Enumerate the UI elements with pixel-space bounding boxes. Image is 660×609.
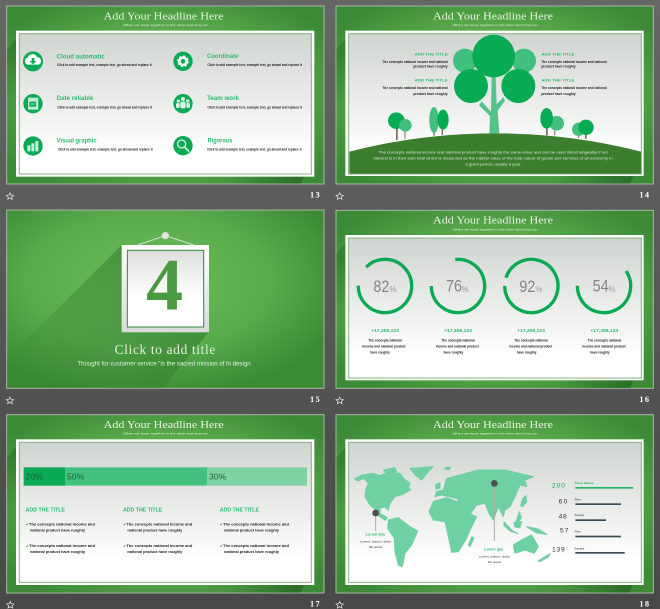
column 2: national product have roughly: [127, 550, 183, 554]
map pin right: Sit amet: [488, 560, 501, 564]
callout bottom left: [382, 79, 448, 96]
small trees left: [388, 107, 449, 140]
stat column 2: The concepts national: [441, 338, 475, 342]
stat 60: Plan: [575, 497, 581, 501]
item: coordinate: Coordinate: [207, 53, 239, 60]
item: rigorous: Click to add example text, example text, go ahead and replace it: [207, 148, 303, 152]
stat column 3: +17,356,123: [517, 328, 545, 334]
stat 60: 60: [559, 499, 568, 506]
slide 17 content panel: [16, 439, 314, 585]
map pin left: Sit amet: [369, 545, 383, 549]
stat 48: Sample: [574, 513, 585, 517]
column 1: ADD THE TITLE: [26, 507, 65, 513]
slide number: 13: [310, 191, 320, 200]
stat 57: 57: [560, 528, 569, 535]
item: cloud automatic: [57, 54, 153, 67]
slide number: 15: [310, 395, 320, 404]
column 2: [123, 507, 192, 554]
slide 17 panel shadows: [7, 448, 304, 593]
stat column 4: [582, 328, 627, 354]
ring 82%: %: [389, 285, 396, 294]
icon: star: [7, 601, 14, 608]
hill: [349, 133, 641, 174]
stacked bar: 50%: [67, 472, 85, 482]
callout bottom left: product have roughly: [413, 92, 448, 96]
map pin left: Lorem Ipls: [366, 533, 385, 537]
item: visual graphic: Click to add example text, example text, go ahead and replace it: [58, 148, 154, 152]
slide 18: [336, 415, 653, 608]
slide 14: [336, 6, 653, 200]
slide number: 16: [639, 395, 649, 404]
item: cloud automatic: Click to add example text, example text, go ahead and replace it: [57, 63, 153, 67]
column 3: ADD THE TITLE: [220, 507, 259, 513]
stat column 2: have roughly: [444, 350, 463, 354]
slide 18 panel shadows: [336, 448, 633, 593]
icon: cloud download: [23, 51, 43, 71]
callout top right: [541, 53, 607, 69]
item: rigorous: [207, 138, 303, 152]
hill paragraph: The concepts national income and national product have roughly the same value and can be used interchangeably if our: [379, 151, 609, 155]
stat 48: [559, 513, 606, 521]
hanging card: [122, 232, 209, 332]
stat column 1: +17,356,123: [371, 328, 399, 334]
column 3: national product have roughly: [224, 529, 279, 533]
stat 57: [560, 528, 621, 537]
icon: magnifier: [173, 136, 193, 155]
world map: [354, 467, 550, 567]
column 3: ✓The concepts national income and: [220, 544, 289, 548]
icon: team: [173, 94, 193, 113]
column 2: ADD THE TITLE: [123, 507, 163, 513]
column 1: national product have roughly: [30, 550, 85, 554]
slide 15 title: Click to add title: [115, 342, 215, 357]
item: visual graphic: [57, 138, 154, 152]
map pin right: [479, 480, 510, 564]
callout top right: The concepts national income and national: [541, 60, 607, 64]
small trees right: [540, 108, 594, 139]
slide 13 subheading: When we hope together in the short and long run: [123, 23, 209, 27]
stat column 2: [436, 328, 480, 354]
slide 13: [6, 6, 324, 200]
map pin left: Lorem, ipsum, dolor: [360, 539, 391, 543]
slide 15 background: [7, 210, 324, 388]
ring 76%: 76: [446, 276, 462, 295]
item: date reliable: Date reliable: [57, 95, 94, 102]
hanging card: 4: [146, 245, 183, 327]
ring 92%: 92: [519, 277, 535, 296]
slide 14 content panel: [345, 31, 644, 176]
ring 82%: [347, 248, 423, 324]
column 2: national product have roughly: [127, 529, 183, 533]
stat column 1: income and national product: [362, 344, 407, 348]
hill paragraph: interest is in their sum total which is measured as the market value of the total output of goods and services of an economy in: [374, 157, 613, 161]
item: rigorous: Rigorous: [208, 138, 233, 145]
stat 200: [552, 481, 633, 489]
item: coordinate: Click to add example text, example text, go ahead and replace it: [207, 63, 303, 67]
slide 16: [336, 210, 653, 404]
slide 17 frame: [7, 415, 324, 593]
stat 139: [552, 546, 625, 554]
slide 16 headline: Add Your Headline Here: [433, 216, 553, 227]
slide 13 frame: [7, 6, 324, 184]
stat column 2: income and national product: [436, 344, 480, 348]
stat column 3: income and national product: [509, 344, 553, 348]
column 1: [26, 507, 95, 554]
slide 15: [6, 210, 324, 404]
callout top left: ADD THE TITLE: [415, 53, 448, 57]
stacked bar: 20%: [26, 472, 43, 482]
stat column 3: The concepts national: [514, 338, 548, 342]
stat column 3: [509, 328, 553, 354]
icon: star: [336, 397, 343, 404]
column 2: ✓The concepts national income and: [123, 523, 192, 527]
stat column 2: +17,356,123: [444, 328, 472, 334]
slide 17 subheading: When we hope together in the short and long run: [123, 432, 209, 436]
ring 76%: [429, 257, 487, 315]
callout bottom right: [541, 79, 607, 96]
stat column 4: The concepts national: [588, 338, 621, 342]
stat 48: 48: [559, 513, 567, 520]
icon: star: [6, 397, 14, 404]
slide 14 frame: [336, 6, 653, 184]
stat 200: New Week: [575, 481, 594, 485]
stacked bar: 30%: [209, 472, 227, 482]
stat column 1: [362, 328, 407, 354]
stat column 4: +17,356,123: [590, 328, 618, 334]
slide 15 subtitle: Thought for customer service "is the sacred mission of hi design: [77, 361, 251, 368]
slide 18 subheading: When we hope together in the short and long run: [453, 432, 538, 436]
stat 57: Plan: [575, 530, 581, 534]
item: date reliable: [57, 95, 153, 110]
ring 92%: [498, 252, 565, 320]
icon: star: [6, 193, 14, 199]
slide 18 frame: [336, 415, 653, 593]
map pin right: Lorem, ipsum, dolor: [479, 554, 510, 558]
ring 92%: %: [535, 285, 542, 294]
hill paragraph: [374, 151, 613, 167]
long shadow: [7, 245, 209, 388]
column 3: ✓The concepts national income and: [220, 523, 289, 527]
callout bottom right: ADD THE TITLE: [541, 79, 575, 83]
stat 139: 139: [552, 546, 565, 553]
slide 18 headline: Add Your Headline Here: [433, 420, 553, 431]
column 1: ✓The concepts national income and: [26, 544, 95, 548]
icon: gear: [173, 52, 193, 71]
callout bottom left: ADD THE TITLE: [415, 79, 448, 83]
icon: star: [336, 193, 343, 199]
column 2: ✓The concepts national income and: [123, 544, 192, 548]
slide 18 content panel: [345, 439, 644, 585]
callout top left: The concepts national income and national: [382, 60, 448, 64]
slide 14 headline: Add Your Headline Here: [433, 11, 553, 22]
callout top right: ADD THE TITLE: [541, 53, 575, 57]
callout bottom right: product have roughly: [541, 92, 576, 96]
ring 54%: 54: [593, 276, 609, 295]
stat 60: [559, 497, 621, 506]
slide 16 content panel: [345, 235, 644, 380]
item: coordinate: [207, 53, 303, 67]
ring 54%: [567, 249, 641, 323]
icon: star: [336, 601, 343, 608]
item: date reliable: Click to add example text, example text, go ahead and replace it: [57, 106, 153, 110]
slide 17 headline: Add Your Headline Here: [104, 420, 224, 431]
slide number: 18: [639, 599, 649, 608]
slide 17: [7, 415, 324, 608]
slide 14 panel shadows: [336, 39, 633, 184]
slide 13 content panel: [16, 31, 314, 177]
stat column 3: have roughly: [517, 350, 537, 354]
stat column 1: The concepts national: [368, 338, 402, 342]
column 3: national product have roughly: [224, 550, 279, 554]
callout bottom left: The concepts national income and national: [382, 86, 448, 90]
slide 13 headline: Add Your Headline Here: [104, 11, 224, 22]
item: team work: [207, 95, 303, 110]
ring 76%: %: [462, 285, 469, 294]
stat 139: Sample: [574, 546, 585, 550]
slide 16 subheading: When we hope together in the short and long run: [453, 227, 538, 231]
ring 82%: 82: [373, 277, 389, 296]
slide number: 17: [310, 599, 320, 608]
slide 14 subheading: When we hope together in the short and long run: [453, 23, 538, 27]
central tree: [453, 35, 536, 133]
icon: document: [23, 94, 43, 113]
callout top right: product have roughly: [541, 65, 576, 69]
callout top left: [382, 53, 448, 69]
column 1: national product have roughly: [30, 529, 85, 533]
hill paragraph: a given period, usually a year.: [465, 163, 522, 167]
stat column 4: income and national product: [582, 344, 627, 348]
callout top left: product have roughly: [413, 65, 448, 69]
stacked bar: [24, 467, 307, 486]
stat 200: 200: [552, 482, 565, 489]
slide 13 panel shadows: [7, 39, 304, 184]
icon: bar graphic: [23, 136, 43, 156]
slide 16 panel shadows: [336, 244, 633, 388]
stat column 4: have roughly: [590, 350, 610, 354]
slide 16 frame: [336, 210, 653, 388]
item: team work: Team work: [207, 95, 239, 102]
map pin left: [360, 510, 391, 549]
column 1: ✓The concepts national income and: [26, 523, 95, 527]
column 3: [220, 507, 289, 554]
callout bottom right: The concepts national income and national: [541, 86, 607, 90]
item: team work: Click to add example text, example text, go ahead and replace it: [207, 106, 303, 110]
item: visual graphic: Visual graphic: [57, 138, 97, 145]
slide number: 14: [639, 191, 650, 200]
item: cloud automatic: Cloud automatic: [57, 54, 105, 61]
ring 54%: %: [608, 285, 615, 294]
map pin right: Lorem Ipls: [484, 548, 503, 552]
stat column 1: have roughly: [370, 350, 390, 354]
